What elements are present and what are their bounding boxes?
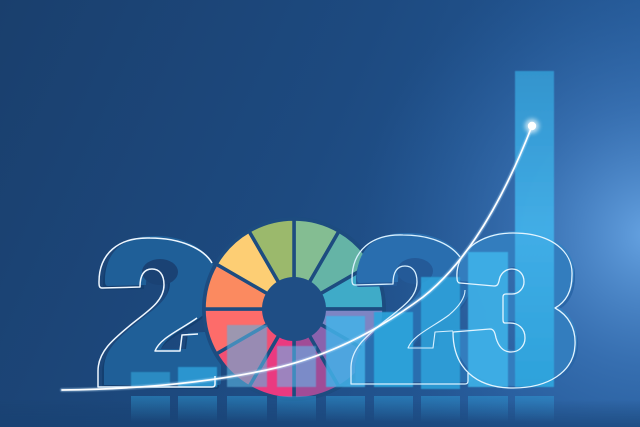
wheel hub [262,277,326,341]
wheel dark ring [202,217,386,401]
bar chart [131,71,554,389]
outline digit 3 [453,233,575,388]
outline digit 2 middle [351,235,468,384]
growth curve [62,126,532,390]
bar reflections [131,396,554,422]
bar 1 [131,372,170,387]
bar 5 [326,316,365,387]
bar 7 [421,277,460,389]
bar 6 [374,312,413,387]
digit 3 filled [455,231,578,390]
digit outlines [98,233,575,388]
bar 2 [178,367,217,387]
digit 2 left filled [102,236,221,389]
bottom shading [0,400,640,427]
bar 8 [468,252,508,387]
bar 4 [277,346,316,387]
donut wheel chart [202,217,386,401]
wheel segments [204,219,384,399]
outline digit 2 left [98,238,215,387]
bar 3 [227,325,267,387]
digit 2 middle filled [355,233,473,386]
curve end point [525,119,539,133]
bar 9 tall [515,71,554,387]
